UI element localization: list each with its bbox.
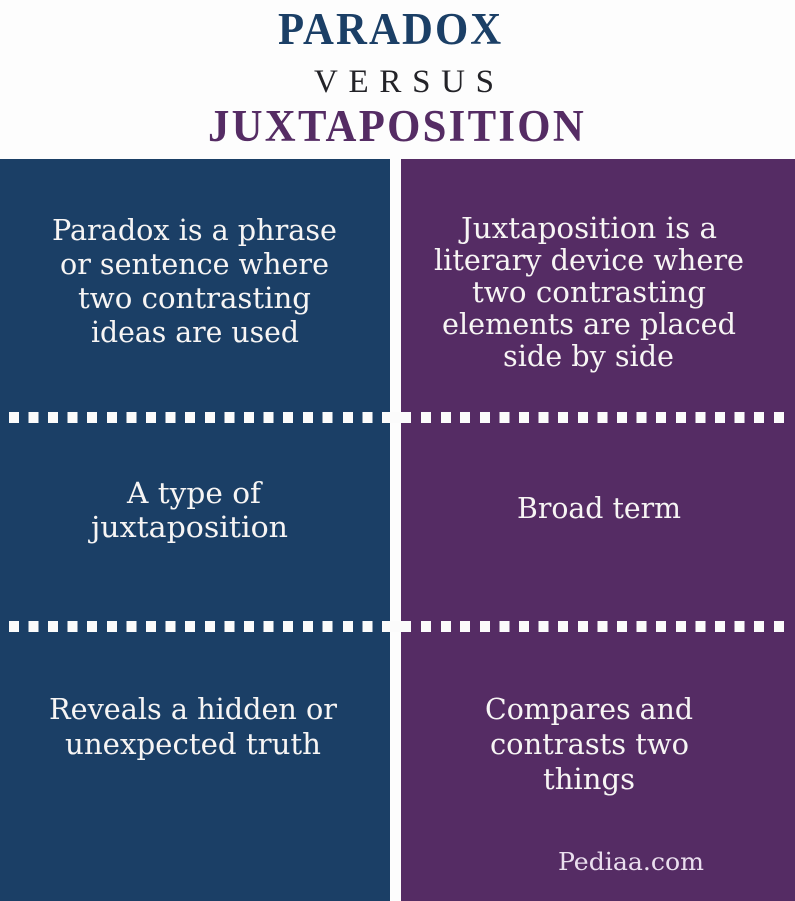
text: juxtaposition definition [434, 211, 744, 373]
text: juxtaposition purpose: contrasts two [490, 727, 689, 761]
text: paradox purpose: Reveals a hidden or [49, 692, 337, 726]
text: juxtaposition definition: side by side [503, 339, 674, 373]
text: paradox definition: ideas are used [91, 315, 299, 349]
text: juxtaposition definition: literary device where [434, 243, 744, 277]
text: paradox scope [88, 476, 288, 544]
dotted divider: upper [9, 412, 784, 423]
text: paradox definition: or sentence where [60, 247, 329, 281]
text: paradox purpose [49, 692, 337, 761]
title: versus: VERSUS [314, 64, 494, 100]
text: paradox definition: two contrasting [78, 281, 311, 315]
text: juxtaposition purpose: Compares and [485, 692, 693, 726]
text: juxtaposition definition: Juxtaposition is a [458, 211, 717, 245]
title: Juxtaposition: JUXTAPOSITION [208, 100, 584, 151]
text: juxtaposition scope: Broad term [517, 491, 681, 525]
panel: paradox column [0, 159, 390, 901]
text: paradox purpose: unexpected truth [65, 727, 321, 761]
title: Paradox: PARADOX [278, 3, 501, 54]
text: juxtaposition purpose [485, 692, 693, 796]
dotted divider: lower [9, 621, 784, 632]
text: paradox definition [52, 213, 337, 349]
text: juxtaposition definition: elements are placed [442, 307, 736, 341]
text: juxtaposition definition: two contrasting [472, 275, 706, 309]
title [208, 3, 584, 151]
text: paradox definition: Paradox is a phrase [52, 213, 337, 247]
text: juxtaposition purpose: things [543, 762, 635, 796]
panel: juxtaposition column [401, 159, 795, 901]
logo: Pediaa.com: Pediaa.com [558, 848, 704, 876]
text: paradox scope: juxtaposition [88, 510, 288, 544]
text: paradox scope: A type of [126, 476, 263, 510]
